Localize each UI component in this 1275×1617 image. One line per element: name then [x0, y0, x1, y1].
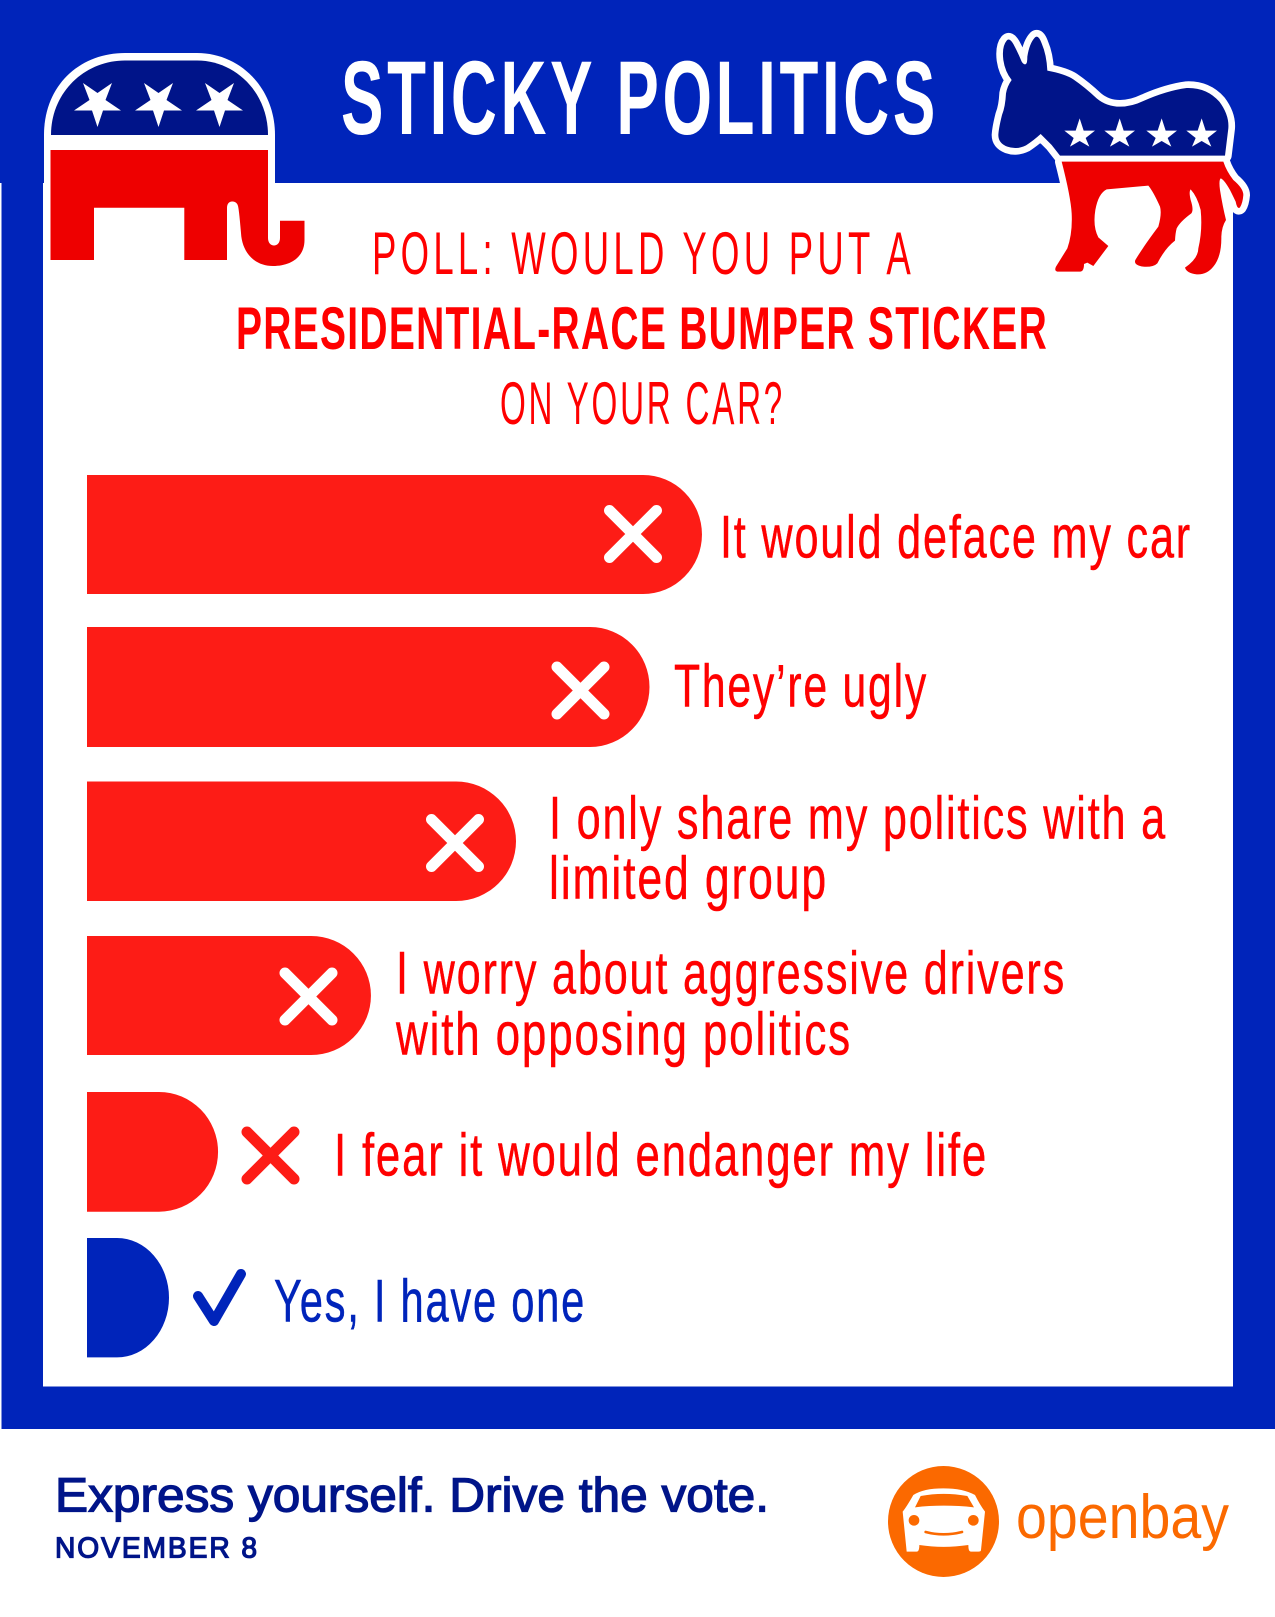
heading: poll question: ON YOUR CAR? [500, 370, 785, 437]
row: endanger my life [87, 1092, 988, 1212]
white panel [43, 183, 1233, 1386]
row: limited group [87, 782, 1167, 912]
row: aggressive drivers [87, 936, 1066, 1068]
row: endanger my life: I fear it would endanger my life [334, 1122, 988, 1188]
icon: republican elephant [44, 53, 304, 266]
icon: democratic donkey [998, 37, 1243, 274]
heading: poll question: POLL: WOULD YOU PUT A [372, 220, 915, 287]
row: yes, I have one [87, 1238, 586, 1357]
row: it would deface my car [87, 475, 1192, 594]
row: aggressive drivers: with opposing politics [395, 1000, 852, 1068]
row: they're ugly: They’re ugly [674, 652, 928, 720]
row: limited group: limited group [549, 844, 828, 912]
footer date: NOVEMBER 8 [55, 1532, 259, 1564]
logo: openbay [888, 1466, 1229, 1577]
logo: openbay: openbay [1016, 1483, 1229, 1552]
footer tagline: Express yourself. Drive the vote. [55, 1470, 769, 1522]
heading: poll question [236, 220, 1048, 437]
row: yes, I have one: Yes, I have one [274, 1268, 586, 1334]
row: they're ugly [87, 627, 928, 747]
